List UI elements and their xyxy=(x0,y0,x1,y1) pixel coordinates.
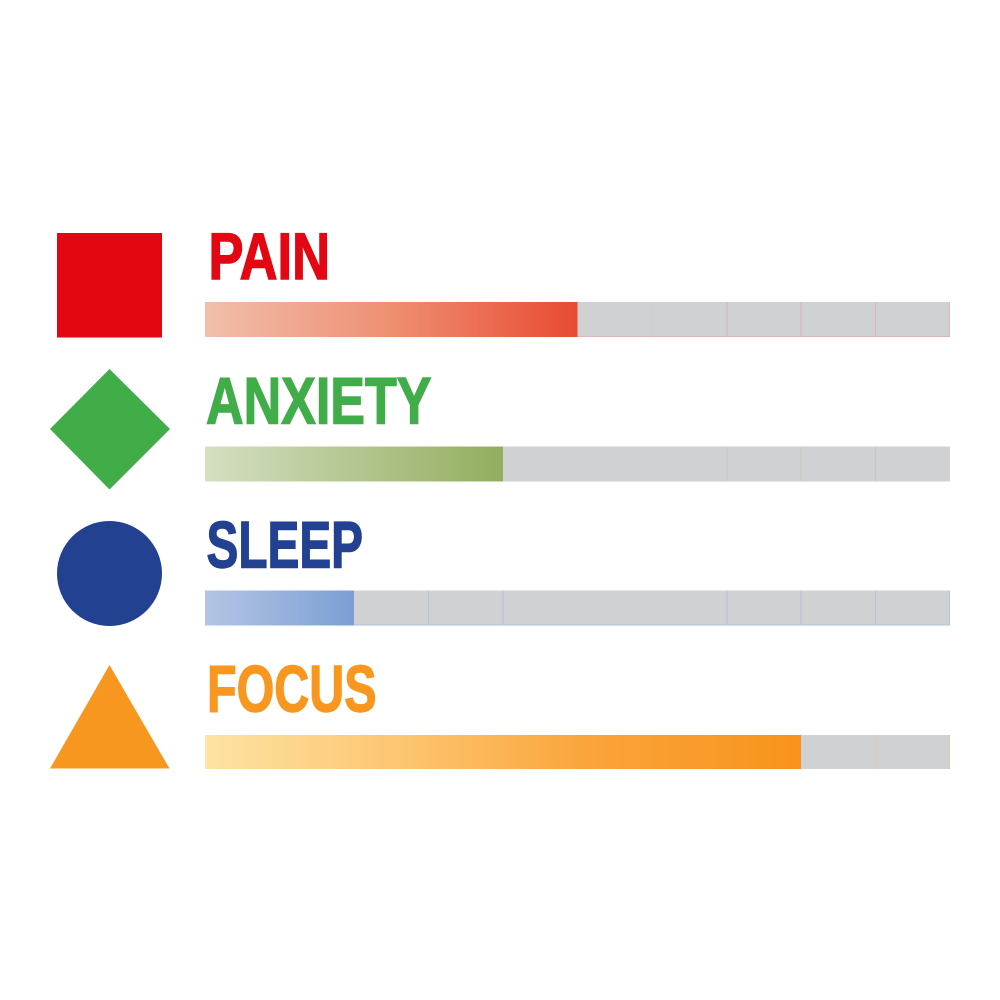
icon: blue circle xyxy=(57,521,162,626)
icon: red square xyxy=(57,233,162,338)
bar: anxiety level xyxy=(205,446,950,482)
row: focus xyxy=(50,652,950,769)
bar: sleep level xyxy=(205,590,950,626)
heading: pain: PAIN xyxy=(208,219,330,293)
bar: pain level xyxy=(205,302,950,337)
heading: sleep: SLEEP xyxy=(206,508,363,582)
row: anxiety xyxy=(50,364,950,490)
bar: focus level xyxy=(205,735,950,769)
icon: orange triangle xyxy=(50,665,170,768)
row: pain xyxy=(57,219,950,338)
icon: green diamond xyxy=(50,369,170,490)
heading: focus: FOCUS xyxy=(207,652,376,726)
heading: anxiety: ANXIETY xyxy=(206,364,432,438)
row: sleep xyxy=(57,508,950,626)
